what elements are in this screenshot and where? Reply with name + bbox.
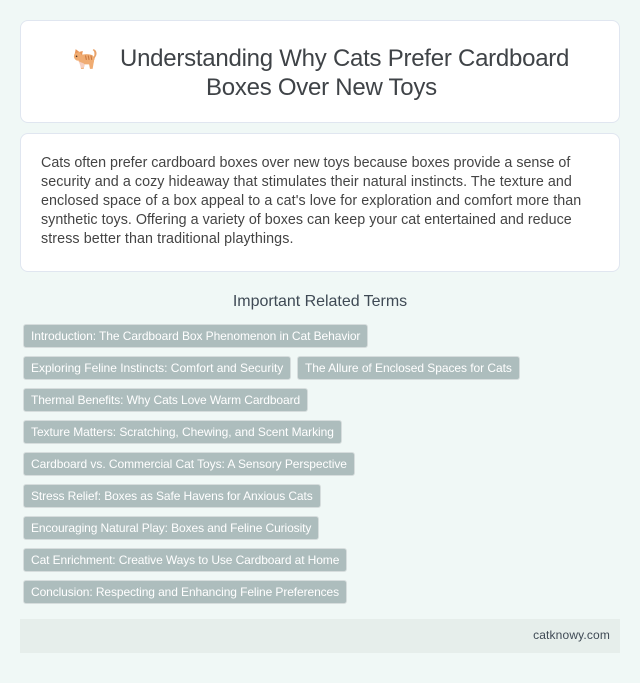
tag [23, 356, 291, 380]
tag: Texture Matters: Scratching, Chewing, and Scent Marking [31, 425, 334, 439]
tag [23, 484, 321, 508]
panel: intro paragraph [20, 133, 620, 272]
tag [23, 324, 368, 348]
footer source text: catknowy.com [533, 628, 610, 642]
footer bar [20, 619, 620, 653]
tag [23, 548, 347, 572]
tag: Cardboard vs. Commercial Cat Toys: A Sensory Perspective [31, 457, 347, 471]
tag: Encouraging Natural Play: Boxes and Feline Curiosity [31, 521, 311, 535]
tag: Thermal Benefits: Why Cats Love Warm Cardboard [31, 393, 300, 407]
tag [297, 356, 520, 380]
tag: Stress Relief: Boxes as Safe Havens for Anxious Cats [31, 489, 313, 503]
tag [23, 516, 319, 540]
heading: Understanding Why Cats Prefer Cardboard [120, 45, 569, 72]
tag: The Allure of Enclosed Spaces for Cats [305, 361, 512, 375]
text block: intro: security and a cozy hideaway that stimulates their natural instincts. The texture and [41, 174, 572, 190]
heading: related terms: Important Related Terms [233, 293, 407, 310]
text block: intro: synthetic toys. Offering a variety of boxes can keep your cat entertained and reduce [41, 212, 572, 228]
tag: Introduction: The Cardboard Box Phenomenon in Cat Behavior [31, 329, 360, 343]
heading: Boxes Over New Toys [206, 74, 437, 101]
text block: intro: stress better than traditional playthings. [41, 231, 294, 247]
tag [23, 580, 347, 604]
tag [23, 420, 342, 444]
panel: title card [20, 20, 620, 123]
tag: Cat Enrichment: Creative Ways to Use Cardboard at Home [31, 553, 339, 567]
tag [23, 388, 308, 412]
tag [23, 452, 355, 476]
text block: intro: enclosed space of a box appeal to a cat's love for exploration and comfort more than [41, 193, 581, 209]
heading [120, 45, 569, 101]
text block: intro [41, 155, 581, 247]
tag: Exploring Feline Instincts: Comfort and Security [31, 361, 283, 375]
text block: intro: Cats often prefer cardboard boxes over new toys because boxes provide a sense of [41, 155, 570, 171]
tag list [23, 324, 520, 604]
tag: Conclusion: Respecting and Enhancing Feline Preferences [31, 585, 339, 599]
icon: cat [74, 49, 96, 69]
